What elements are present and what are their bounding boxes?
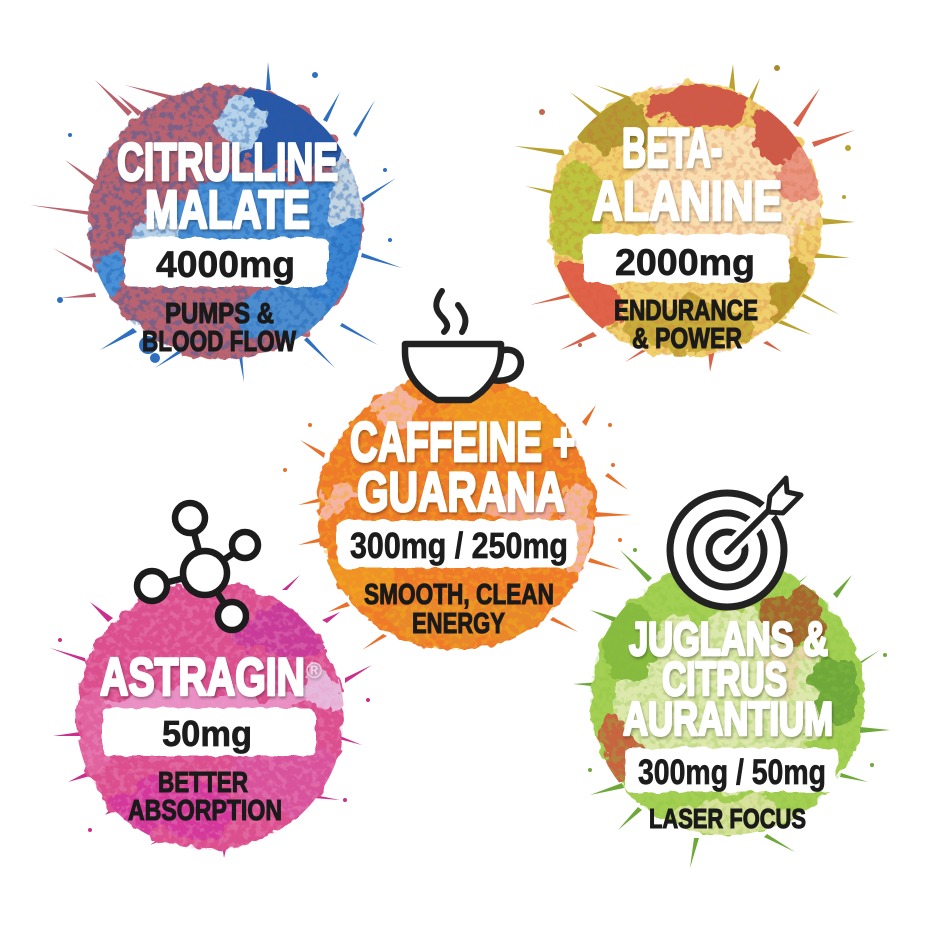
panel: juglans and citrus aurantium bbox=[573, 478, 890, 868]
infographic canvas bbox=[30, 62, 890, 868]
benefit: better absorption: ABSORPTION bbox=[128, 795, 282, 827]
title: juglans and citrus aurantium: JUGLANS & bbox=[629, 612, 828, 665]
benefit: better absorption: BETTER bbox=[158, 767, 248, 799]
splatter spikes: caffeine bbox=[283, 405, 632, 650]
colour patches bbox=[73, 582, 346, 850]
paint splash: green bbox=[573, 548, 890, 868]
icon: target with arrow bbox=[670, 478, 801, 607]
benefit: pumps and blood flow: BLOOD FLOW bbox=[142, 326, 296, 358]
colour patches bbox=[545, 83, 826, 357]
benefit: smooth, clean energy: ENERGY bbox=[412, 608, 505, 640]
benefit: laser focus: LASER FOCUS bbox=[649, 803, 806, 834]
dose bar: 50mg bbox=[102, 708, 315, 756]
dose bar: 50mg: 50mg bbox=[162, 713, 252, 754]
benefit: smooth, clean energy bbox=[364, 579, 554, 640]
benefit: better absorption bbox=[128, 767, 282, 827]
title: astragin: ASTRAGIN bbox=[100, 648, 305, 707]
title: caffeine + guarana: GUARANA bbox=[357, 460, 565, 523]
benefit: smooth, clean energy: SMOOTH, CLEAN bbox=[364, 579, 554, 611]
title: citrulline malate: MALATE bbox=[145, 180, 310, 240]
benefit: pumps and blood flow bbox=[142, 298, 296, 358]
title: caffeine + guarana bbox=[350, 410, 575, 523]
panel: beta-alanine bbox=[514, 64, 855, 372]
icon: cup bbox=[405, 344, 521, 400]
title: juglans and citrus aurantium: CITRUS bbox=[662, 652, 787, 705]
title: beta-alanine: BETA- bbox=[622, 116, 722, 179]
splatter spikes: citrulline bbox=[30, 62, 402, 382]
dose bar: 4000mg: 4000mg bbox=[156, 244, 295, 285]
title: beta-alanine bbox=[592, 116, 782, 232]
icon: steam bbox=[436, 291, 465, 332]
icon: coffee cup with steam bbox=[405, 291, 521, 400]
title: citrulline malate: CITRULLINE bbox=[117, 133, 338, 192]
dose bar: 4000mg bbox=[125, 238, 328, 287]
benefit: endurance and power: & POWER bbox=[632, 323, 742, 355]
title: juglans and citrus aurantium bbox=[623, 612, 833, 745]
panel: caffeine and guarana bbox=[283, 291, 632, 650]
paint splash: yellow and red bbox=[514, 64, 855, 372]
splatter spikes: juglans bbox=[573, 548, 890, 868]
colour patches bbox=[318, 374, 600, 650]
dose bar: 2000mg bbox=[583, 234, 790, 283]
title: juglans and citrus aurantium: AURANTIUM bbox=[623, 692, 833, 745]
splatter spikes: astragin bbox=[50, 575, 372, 858]
icon: molecule bbox=[137, 503, 258, 630]
panel: astragin bbox=[50, 503, 372, 858]
panel: citrulline malate bbox=[30, 62, 402, 382]
dose bar: 300mg / 50mg: 300mg / 50mg bbox=[638, 753, 826, 792]
dose bar: 2000mg: 2000mg bbox=[615, 242, 755, 283]
paint splash: pink bbox=[50, 575, 372, 858]
colour patches bbox=[88, 81, 385, 359]
colour patches bbox=[590, 561, 864, 842]
benefit: endurance and power: ENDURANCE bbox=[614, 295, 758, 327]
dose bar: 300mg / 250mg: 300mg / 250mg bbox=[350, 525, 568, 566]
benefit: pumps and blood flow: PUMPS & bbox=[165, 298, 274, 330]
paint splash: blue and mauve bbox=[30, 62, 402, 382]
paint splash: orange bbox=[283, 374, 632, 650]
title: beta-alanine: ALANINE bbox=[592, 169, 782, 232]
benefit: endurance and power bbox=[614, 295, 758, 355]
title: caffeine + guarana: CAFFEINE + bbox=[350, 410, 575, 473]
title: astragin: ® bbox=[306, 658, 322, 683]
splatter spikes: beta-alanine bbox=[514, 64, 855, 372]
title: citrulline malate bbox=[117, 133, 338, 240]
